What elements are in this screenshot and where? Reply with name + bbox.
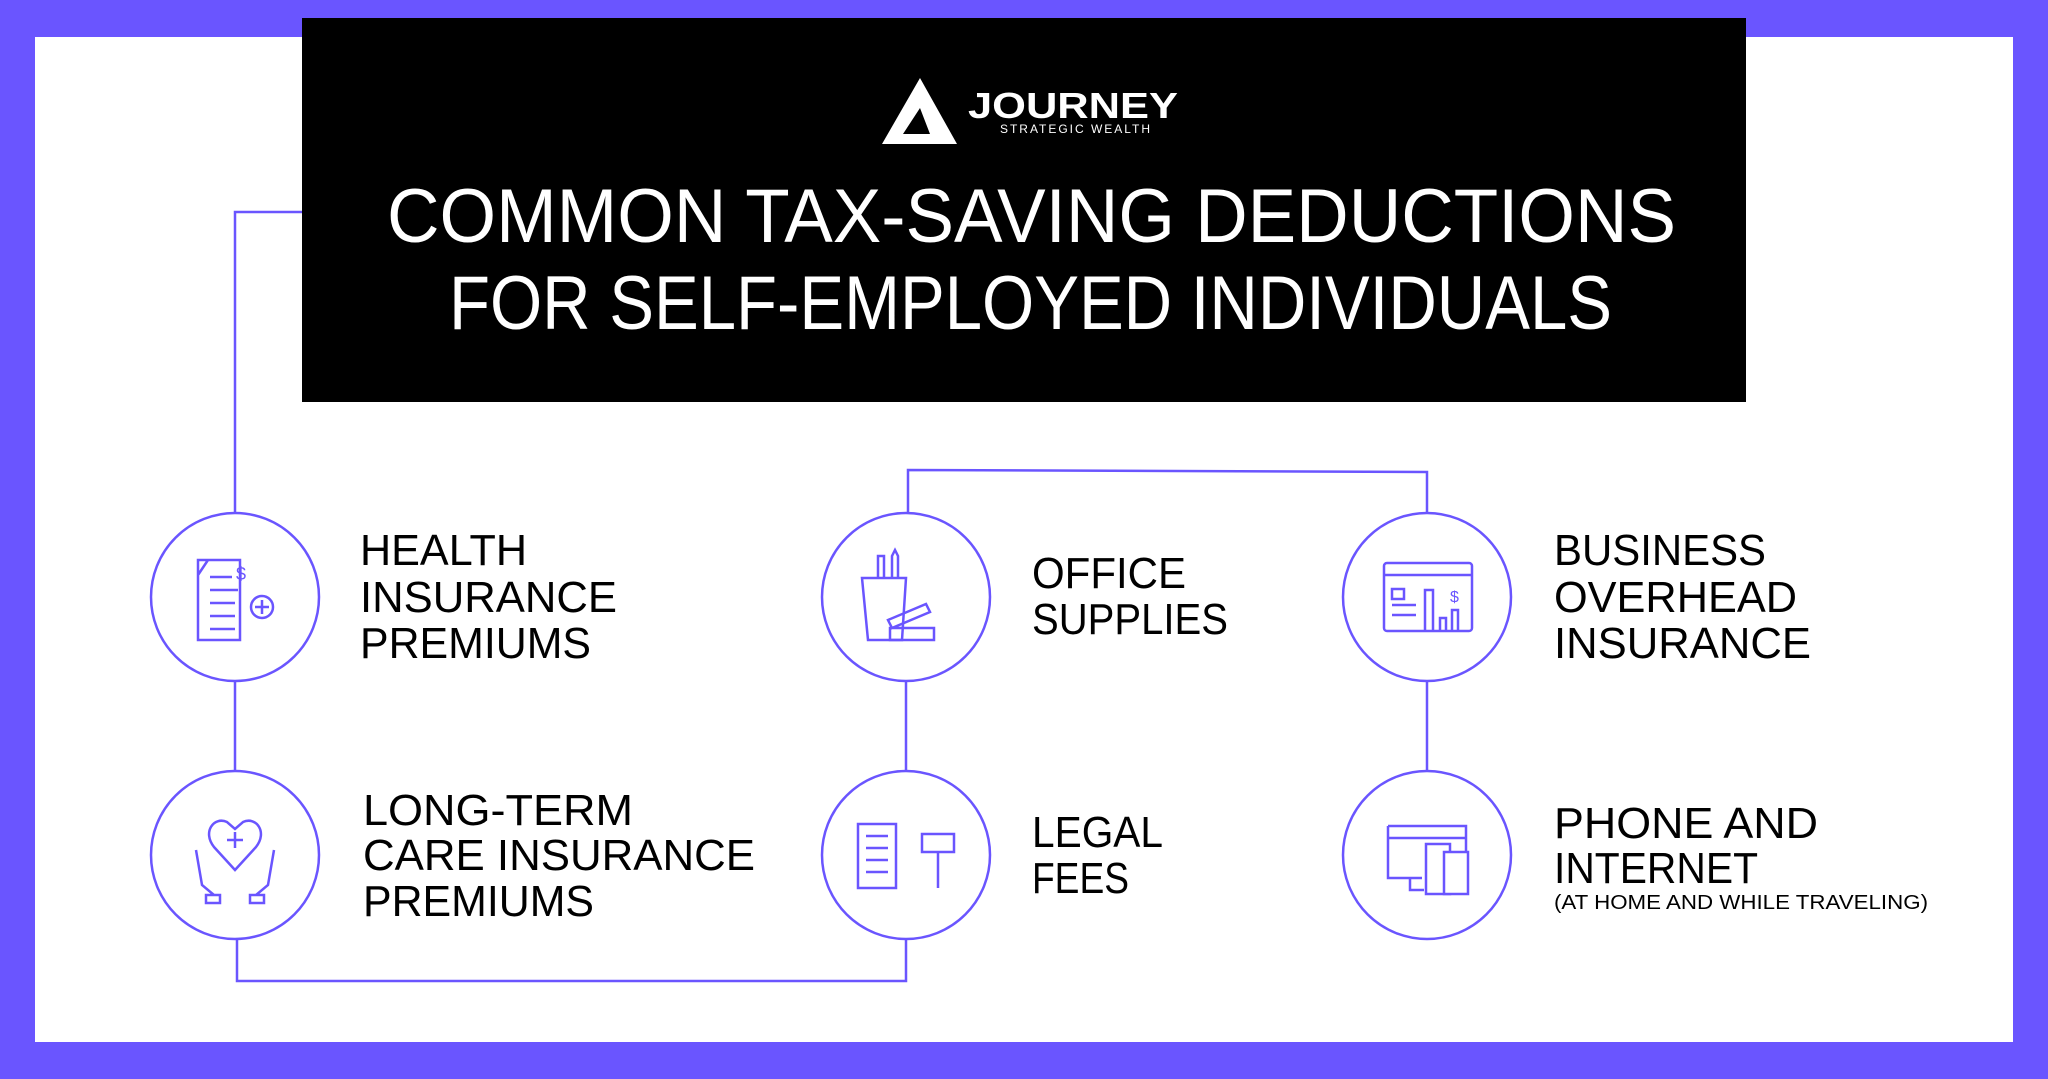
- label: health insurance premiums: HEALTH: [360, 526, 527, 575]
- label: business overhead insurance: BUSINESS: [1554, 526, 1766, 575]
- icon: business overhead insurance: [1343, 513, 1511, 681]
- icon: business overhead insurance: $: [1450, 589, 1459, 606]
- label: business overhead insurance: [1554, 526, 1811, 668]
- label: office supplies: [1032, 549, 1228, 644]
- title: [387, 174, 1676, 346]
- circles with icons: [151, 513, 1511, 939]
- label: long-term care: PREMIUMS: [363, 877, 594, 926]
- label: office supplies: SUPPLIES: [1032, 595, 1228, 644]
- label: phone and internet: [1554, 799, 1928, 914]
- labels: [360, 526, 1928, 926]
- label: phone and internet: (AT HOME AND WHILE TRAVELING): [1554, 892, 1928, 914]
- title: COMMON TAX-SAVING DEDUCTIONS: [387, 174, 1676, 259]
- label: business overhead insurance: OVERHEAD: [1554, 573, 1797, 622]
- label: phone and internet: INTERNET: [1554, 844, 1758, 893]
- label: office supplies: OFFICE: [1032, 549, 1186, 598]
- title: FOR SELF-EMPLOYED INDIVIDUALS: [449, 261, 1612, 346]
- label: health insurance premiums: INSURANCE: [360, 573, 617, 622]
- header panel: [302, 18, 1746, 402]
- icon: health insurance document: $: [236, 564, 246, 584]
- label: long-term care: LONG-TERM: [363, 786, 633, 835]
- icon: office supplies: [822, 513, 990, 681]
- label: health insurance premiums: [360, 526, 617, 668]
- icon: phone and internet devices: [1343, 771, 1511, 939]
- label: health insurance premiums: PREMIUMS: [360, 619, 591, 668]
- label: legal fees: [1032, 808, 1163, 903]
- logo: STRATEGIC WEALTH: [1000, 122, 1150, 136]
- icon: health insurance document: [151, 513, 319, 681]
- label: phone and internet: PHONE AND: [1554, 799, 1818, 848]
- label: business overhead insurance: INSURANCE: [1554, 619, 1811, 668]
- label: long-term care: CARE INSURANCE: [363, 831, 755, 880]
- logo: [882, 78, 1178, 144]
- icon: long-term care heart hands: [151, 771, 319, 939]
- connector lines: [235, 212, 1427, 981]
- label: legal fees: FEES: [1032, 854, 1129, 903]
- icon: legal fees: [822, 771, 990, 939]
- label: long-term care: [363, 786, 755, 926]
- logo: JOURNEY: [968, 85, 1178, 126]
- label: legal fees: LEGAL: [1032, 808, 1163, 857]
